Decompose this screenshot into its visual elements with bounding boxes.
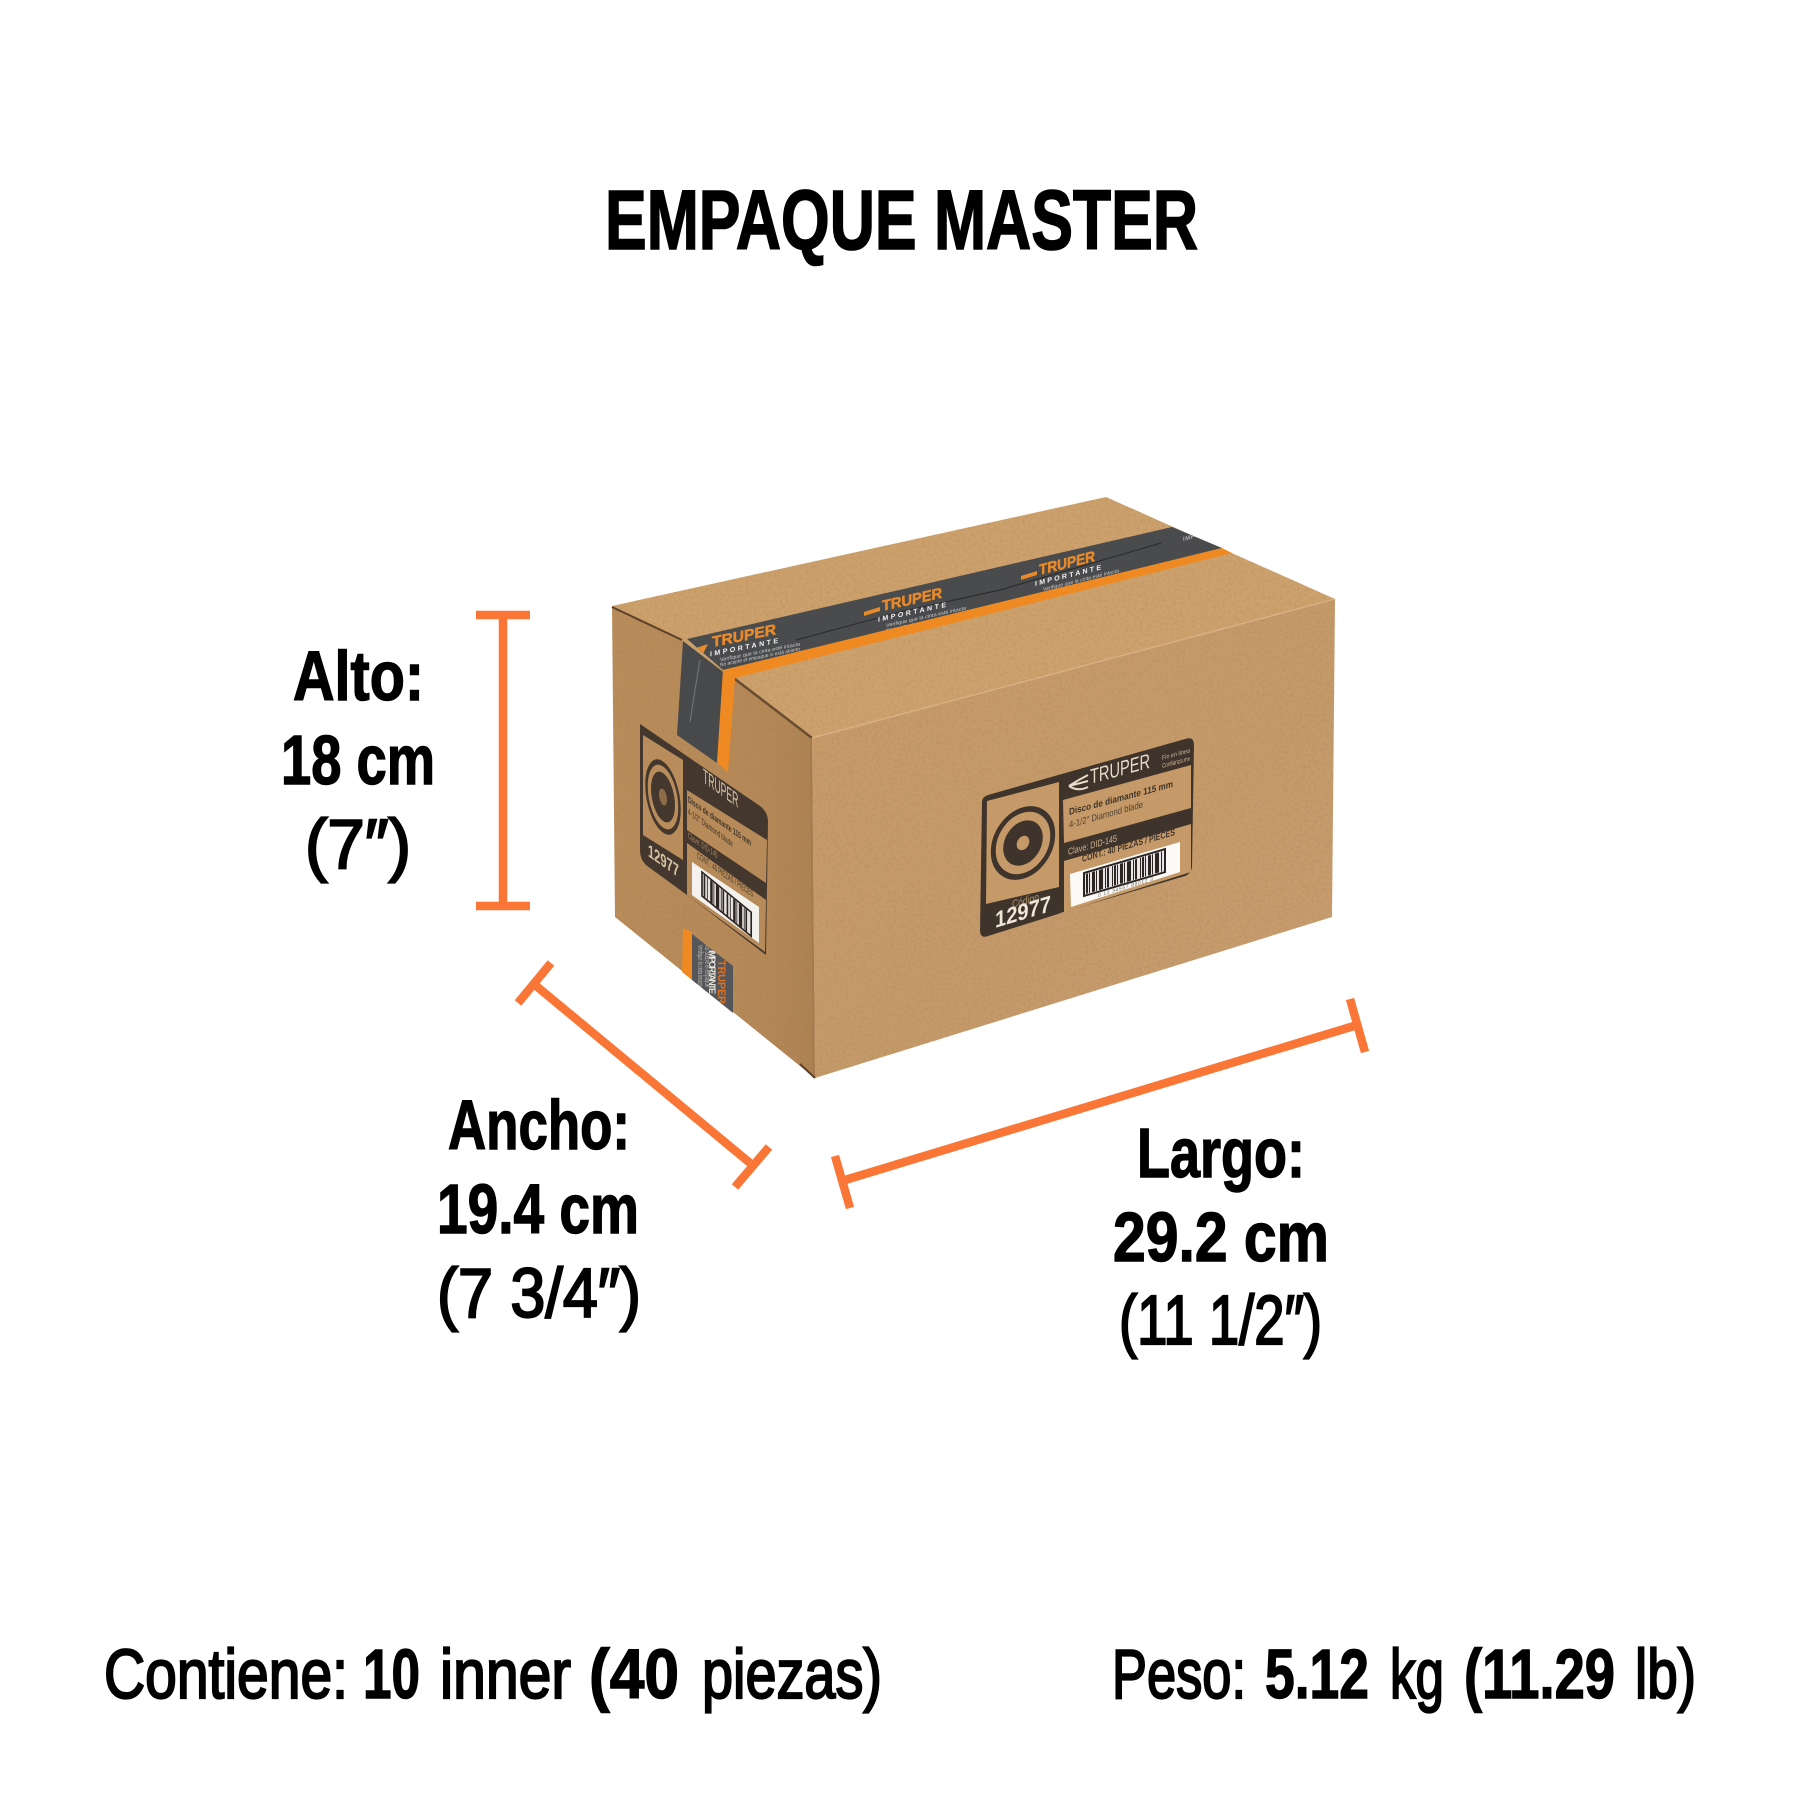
tape prints xyxy=(697,535,1196,666)
white barcode label xyxy=(1070,842,1180,907)
tape prints: No acepte el empaque si está abierto xyxy=(886,611,966,634)
dimension label: largo xyxy=(1113,1114,1329,1359)
logo wordmark: TRUPER xyxy=(1090,749,1150,789)
dimension bar: alto xyxy=(476,615,530,906)
footer: contents: Contiene: xyxy=(104,1635,348,1713)
dimension bar: largo xyxy=(835,999,1365,1208)
label inner card xyxy=(643,735,683,860)
top packing tape xyxy=(687,527,1232,678)
product name: Disco de diamante 115 mm xyxy=(688,793,751,848)
dimension label: ancho: (7 3/4″) xyxy=(437,1254,641,1332)
dimension label: alto: (7″) xyxy=(305,805,411,883)
contents: CONT.: 40 PIEZAS / PIECES xyxy=(1082,827,1175,865)
code number: 12977 xyxy=(995,891,1051,933)
footer: weight: Peso: xyxy=(1112,1635,1246,1713)
tape prints: Verifique que la cinta esté intacta xyxy=(886,606,966,629)
white barcode label xyxy=(692,862,759,943)
tape prints: No acepte el empaque si está abierto xyxy=(720,646,800,668)
code: 12977 xyxy=(648,840,679,882)
tape crease xyxy=(796,543,1161,640)
tape prints: Verifique que la cinta esté intacta xyxy=(720,641,800,663)
dimension label: largo: 29.2 cm xyxy=(1113,1198,1329,1276)
footer: weight: kg xyxy=(1390,1635,1444,1713)
label description area xyxy=(687,790,767,883)
flap fold lines xyxy=(612,599,1335,1078)
footer: weight: 5.12 xyxy=(1265,1635,1369,1713)
dimension label: largo: (11 1/2″) xyxy=(1119,1281,1322,1359)
left face bottom tape: No acepte el empaque xyxy=(703,945,710,987)
product name english: 4-1/2" Diamond blade xyxy=(1069,799,1143,831)
dimension label: ancho: Ancho: xyxy=(448,1086,630,1164)
dimension label: ancho: 19.4 cm xyxy=(437,1170,639,1248)
product name: Disco de diamante 115 mm xyxy=(1069,779,1173,818)
dimension label: alto: 18 cm xyxy=(281,721,435,799)
contents: CONT.: 40 PIEZAS / PIECES xyxy=(697,849,753,899)
codigo: Código xyxy=(1012,892,1039,911)
box front face xyxy=(812,599,1335,1078)
left face product label xyxy=(640,724,768,955)
tape prints: IMPORTANTE xyxy=(878,601,946,624)
dimension label: ancho xyxy=(437,1086,641,1332)
barcode xyxy=(702,872,751,936)
product name english: 4-1/2" Diamond blade xyxy=(688,805,733,850)
logo tagline second line: Confianza.mx xyxy=(1162,755,1190,770)
left face bottom tape: IMPORTANTE xyxy=(707,950,717,994)
footer: contents: inner xyxy=(440,1635,571,1713)
dimension bar: ancho xyxy=(518,963,769,1187)
dimension label: alto xyxy=(281,637,435,883)
front face product label xyxy=(980,738,1194,937)
label outline xyxy=(980,738,1194,937)
footer: contents: piezas) xyxy=(702,1635,882,1713)
logo tagline: Fin en línea xyxy=(1162,747,1190,762)
logo icon xyxy=(1069,775,1088,789)
dimension label: alto: Alto: xyxy=(293,637,424,715)
orange tape stripe xyxy=(723,548,1232,678)
label outline xyxy=(640,724,768,955)
photo: cardboard shipping box xyxy=(600,490,1345,1090)
footer: contents xyxy=(104,1635,882,1713)
tape prints: IMPORTANTE xyxy=(1035,564,1101,588)
left face bottom tape: TRUPER xyxy=(715,960,727,1004)
left face bottom tape xyxy=(682,928,733,1013)
footer: contents: (40 xyxy=(589,1635,679,1713)
tape prints: TRUPER xyxy=(1039,548,1095,579)
tape prints: IMPORT xyxy=(1183,530,1209,543)
left face bottom tape: Verifique la cinta intacta xyxy=(696,945,703,987)
tape prints: No acepte el empaque si está abierto xyxy=(1043,573,1119,598)
disc icon xyxy=(993,802,1053,884)
tape prints: Verifique que la cinta esté intacta xyxy=(1043,568,1119,593)
footer: weight: (11.29 xyxy=(1464,1635,1615,1713)
label inner card xyxy=(986,782,1059,904)
logo wordmark: TRUPER xyxy=(703,764,738,812)
box left face xyxy=(612,606,815,1078)
disc icon xyxy=(646,752,680,842)
barcode xyxy=(1084,849,1165,896)
tape prints: TRUPER xyxy=(712,621,776,651)
dimension label: largo: Largo: xyxy=(1137,1114,1305,1192)
clave: Clave: DID-145 xyxy=(1068,833,1117,858)
footer: weight xyxy=(1112,1635,1696,1713)
box top face xyxy=(612,497,1335,738)
title: EMPAQUE MASTER xyxy=(605,173,1198,267)
footer: contents: 10 xyxy=(363,1635,420,1713)
footer: weight: lb) xyxy=(1635,1635,1696,1713)
gray tape band xyxy=(687,527,1222,670)
tape prints: IMPORTANTE xyxy=(710,638,778,658)
cardboard texture xyxy=(600,490,1345,1090)
left face vertical tape xyxy=(677,641,735,772)
barcode number: 0 12 34567 89012 3 xyxy=(1098,877,1153,899)
label description area xyxy=(1063,765,1191,843)
tape prints: TRUPER xyxy=(882,585,942,615)
clave: Clave: DID-145 xyxy=(688,829,718,861)
